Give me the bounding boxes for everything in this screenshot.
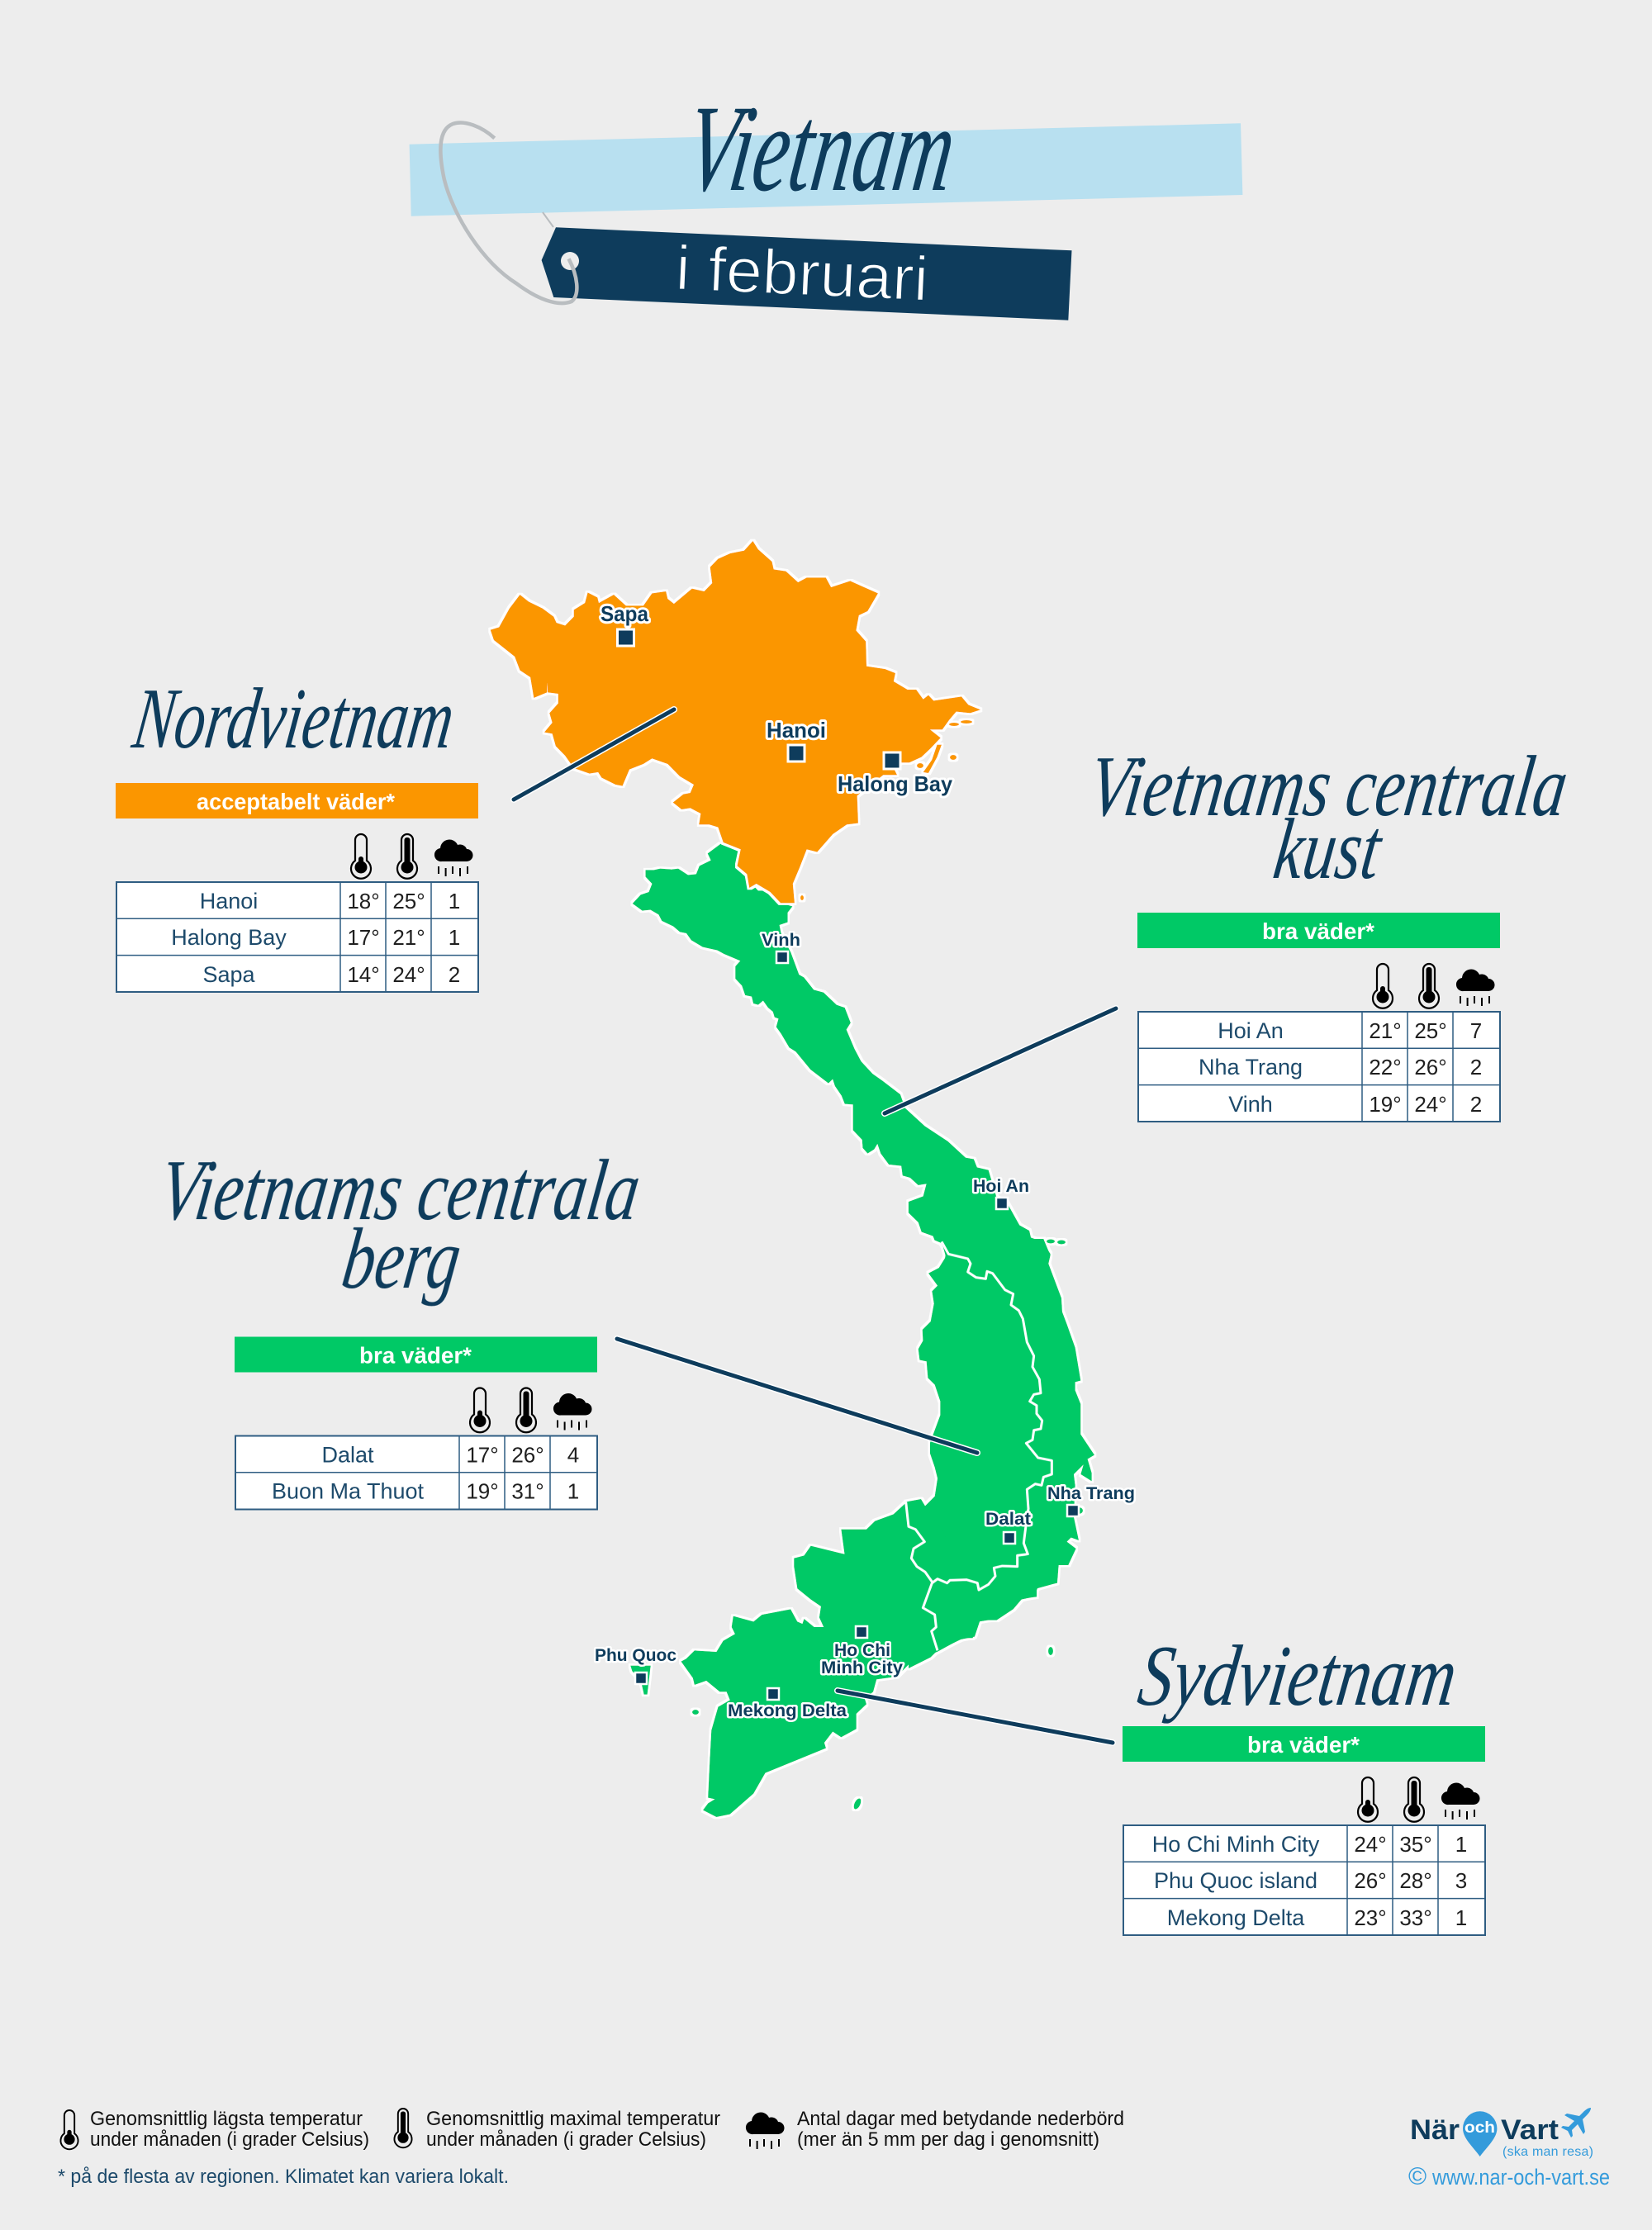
- heading: Vietnams centrala berg: Vietnams centrala: [154, 1141, 646, 1238]
- table: 18°: [347, 889, 380, 913]
- heading: Vietnams centrala berg: [154, 1141, 646, 1307]
- rating band: [235, 1336, 597, 1373]
- table: 26°: [1414, 1055, 1447, 1079]
- table: 24°: [1354, 1832, 1387, 1857]
- panel: Sydvietnam weather: [1123, 1726, 1485, 1935]
- table: Nha Trang: [1199, 1055, 1303, 1079]
- table: 1: [449, 925, 460, 950]
- table: 2: [449, 962, 460, 987]
- title banner: Vietnam: Vietnam: [678, 80, 964, 217]
- table: 26°: [511, 1442, 544, 1467]
- leader line: central coast: [885, 1008, 1116, 1113]
- city label: Ho Chi Minh City: [821, 1626, 903, 1677]
- table: 7: [1470, 1018, 1482, 1043]
- website: www.nar-och-vart.se: [1431, 2165, 1610, 2190]
- table: 2: [1470, 1092, 1482, 1117]
- logo: När och Vart: När: [1410, 2114, 1460, 2146]
- table: 24°: [1414, 1092, 1447, 1117]
- table: 25°: [1414, 1018, 1447, 1043]
- table: 22°: [1369, 1055, 1402, 1079]
- legend: rainy days: [746, 2108, 1124, 2151]
- logo: När och Vart: och: [1464, 2119, 1495, 2137]
- table: Hoi An: [1218, 1018, 1284, 1043]
- map: green regions of Vietnam: [630, 844, 1094, 1817]
- city label: Mekong Delta: [728, 1688, 847, 1720]
- table: 2: [1470, 1055, 1482, 1079]
- table: Mekong Delta: [1167, 1905, 1305, 1930]
- city label: Vinh: Vinh: [762, 931, 800, 950]
- subtitle tag: i februari: i februari: [674, 233, 930, 315]
- table: [235, 1435, 597, 1510]
- table: Phu Quoc island: [1154, 1868, 1317, 1893]
- table: 19°: [466, 1478, 499, 1503]
- city label: Phu Quoc: Phu Quoc: [595, 1646, 676, 1665]
- table: 1: [449, 889, 460, 913]
- city label: Dalat: Dalat: [985, 1510, 1031, 1529]
- panel: central coast weather: [1137, 913, 1500, 1122]
- leader line: north: [514, 709, 674, 799]
- legend: minimum temperature: under månaden (i grader Celsius): [90, 2128, 369, 2151]
- footnote: * på de flesta av regionen. Klimatet kan variera lokalt.: [58, 2166, 509, 2188]
- legend: minimum temperature: Genomsnittlig lägsta temperatur: [90, 2108, 363, 2130]
- city label: Halong Bay: [838, 752, 953, 796]
- panel: Nordvietnam weather: [116, 783, 478, 992]
- city label: Halong Bay: Halong Bay: [838, 771, 953, 796]
- rating band: acceptabelt väder*: [197, 789, 395, 814]
- table: 25°: [392, 889, 425, 913]
- table: 35°: [1399, 1832, 1432, 1857]
- table: [1138, 1012, 1500, 1122]
- table: Sapa: [202, 962, 256, 987]
- city label: Mekong Delta: Mekong Delta: [728, 1701, 847, 1720]
- city label: Hoi An: [973, 1177, 1029, 1209]
- table: 19°: [1369, 1092, 1402, 1117]
- website: ©: [1408, 2163, 1427, 2190]
- rating band: [1123, 1726, 1485, 1762]
- rating band: [1137, 913, 1500, 948]
- city label: Dalat: [985, 1510, 1031, 1544]
- city label: Hanoi: Hanoi: [767, 718, 826, 743]
- heading: Vietnams centrala kust: kust: [1269, 800, 1389, 897]
- title banner: Vietnam: [410, 80, 1242, 217]
- heading: Vietnams centrala kust: [1084, 738, 1574, 897]
- subtitle tag: i februari: [542, 212, 1072, 320]
- legend: rainy days: (mer än 5 mm per dag i genomsnitt): [797, 2128, 1099, 2151]
- legend: maximum temperature: under månaden (i grader Celsius): [426, 2128, 706, 2151]
- city label: Phu Quoc: [595, 1646, 676, 1684]
- table: 14°: [347, 962, 380, 987]
- city label: Hanoi: [767, 718, 826, 762]
- logo: När och Vart: [1410, 2108, 1595, 2159]
- legend: rainy days: Antal dagar med betydande nederbörd: [797, 2108, 1124, 2130]
- city label: Hoi An: Hoi An: [973, 1177, 1029, 1196]
- city label: Nha Trang: [1047, 1484, 1135, 1516]
- table: 28°: [1399, 1868, 1432, 1893]
- map: regional borders: [906, 1241, 1051, 1650]
- table: 21°: [392, 925, 425, 950]
- city label: Ho Chi Minh City: Ho Chi: [834, 1641, 890, 1660]
- heading: Vietnams centrala berg: berg: [337, 1210, 467, 1307]
- city label: Sapa: [601, 601, 648, 646]
- table: 1: [567, 1478, 579, 1503]
- table: Halong Bay: [171, 925, 287, 950]
- table: Ho Chi Minh City: [1152, 1832, 1320, 1857]
- map: orange northern region: [491, 541, 980, 903]
- table: 31°: [511, 1478, 544, 1503]
- rating band: [116, 783, 478, 818]
- table: 23°: [1354, 1905, 1387, 1930]
- heading: Nordvietnam: Nordvietnam: [127, 670, 460, 766]
- rating band: bra väder*: [1262, 918, 1374, 944]
- logo: När och Vart: (ska man resa): [1502, 2145, 1595, 2159]
- table: 24°: [392, 962, 425, 987]
- table: 33°: [1399, 1905, 1432, 1930]
- rating band: bra väder*: [1247, 1732, 1360, 1758]
- city label: Vinh: [762, 931, 800, 963]
- icons: [351, 834, 472, 879]
- table: Vinh: [1228, 1092, 1273, 1117]
- icons: [1358, 1777, 1480, 1822]
- table: 21°: [1369, 1018, 1402, 1043]
- table: 4: [567, 1442, 579, 1467]
- table: Dalat: [321, 1442, 374, 1467]
- leader line: central highlands: [617, 1339, 977, 1453]
- legend: minimum temperature: [60, 2108, 369, 2151]
- rating band: bra väder*: [359, 1343, 472, 1368]
- table: 17°: [347, 925, 380, 950]
- logo: När och Vart: Vart: [1501, 2114, 1559, 2146]
- heading: Sydvietnam: Sydvietnam: [1133, 1627, 1463, 1724]
- tag string loop: [440, 123, 577, 303]
- table: 26°: [1354, 1868, 1387, 1893]
- table: 3: [1455, 1868, 1467, 1893]
- city label: Ho Chi Minh City: Minh City: [821, 1658, 903, 1677]
- table: 1: [1455, 1905, 1467, 1930]
- city label: Nha Trang: Nha Trang: [1047, 1484, 1135, 1503]
- panel: central highlands weather: [235, 1336, 597, 1510]
- table: 17°: [466, 1442, 499, 1467]
- table: 1: [1455, 1832, 1467, 1857]
- leader line: south: [838, 1691, 1113, 1743]
- table: [116, 882, 478, 992]
- table: [1123, 1825, 1485, 1935]
- legend: maximum temperature: [394, 2108, 720, 2151]
- city label: Sapa: Sapa: [601, 601, 648, 626]
- icons: [1373, 964, 1495, 1008]
- table: Buon Ma Thuot: [272, 1478, 425, 1503]
- icons: [470, 1388, 591, 1432]
- table: Hanoi: [200, 889, 258, 913]
- legend: maximum temperature: Genomsnittlig maximal temperatur: [426, 2108, 720, 2130]
